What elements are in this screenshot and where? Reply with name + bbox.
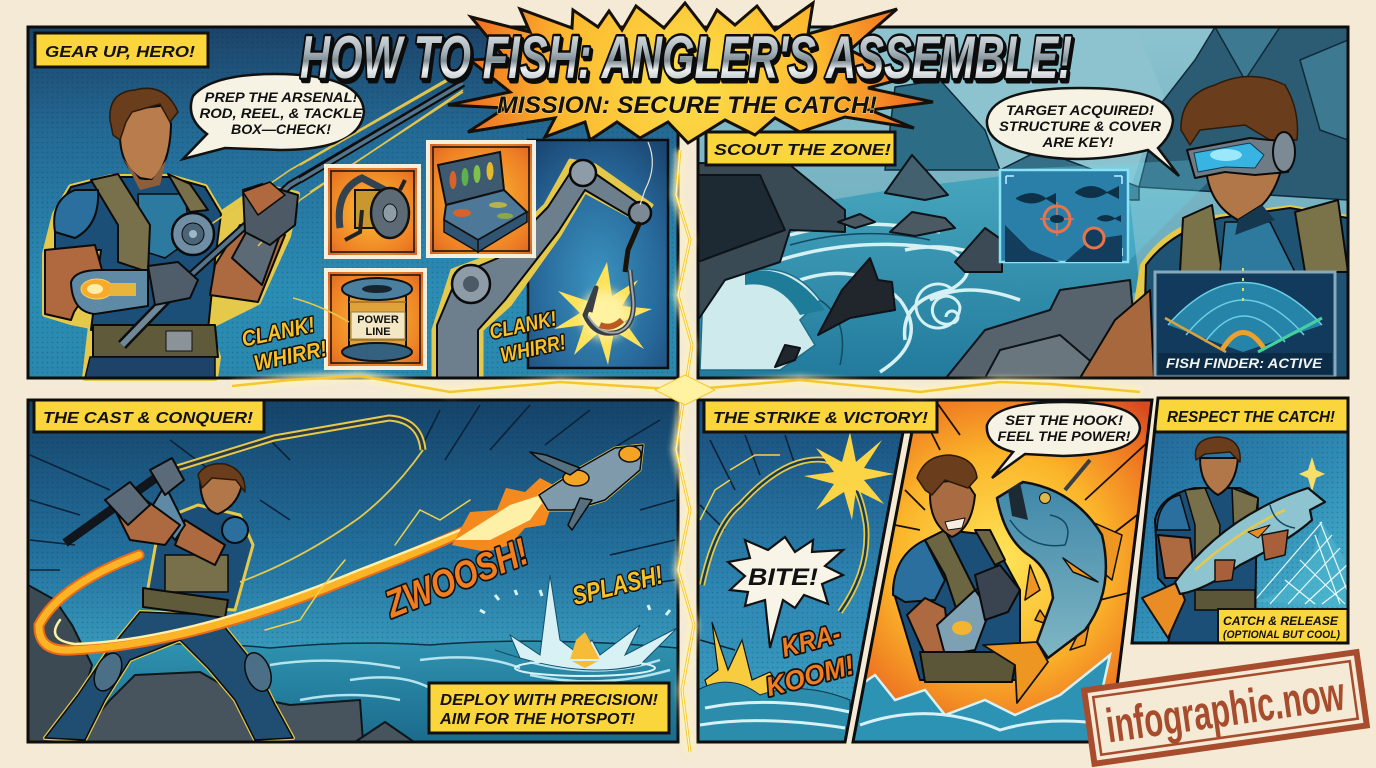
caption: deploy: AIM FOR THE HOTSPOT! — [439, 711, 636, 728]
angry face — [930, 480, 975, 537]
caption: strike: THE STRIKE & VICTORY! — [713, 410, 929, 427]
central dark rock — [818, 258, 895, 335]
speech bubble: arsenal: ROD, REEL, & TACKLE — [200, 106, 364, 121]
speech bubble: target: TARGET ACQUIRED! — [1006, 103, 1155, 118]
straps — [1180, 200, 1348, 272]
title text: HOW TO FISH: ANGLER'S ASSEMBLE! — [300, 24, 1072, 91]
sfx: clank whirr left: CLANK! — [239, 312, 317, 352]
title starburst — [300, 3, 1072, 143]
water — [853, 655, 1120, 742]
panel 3 frame — [28, 400, 678, 742]
icon: power line spool — [293, 270, 425, 368]
hair — [1181, 76, 1298, 145]
speech bubble: arsenal — [183, 74, 364, 159]
sfx: kra-koom: KRA- — [778, 618, 844, 663]
head — [120, 105, 171, 180]
inner blue panel — [528, 140, 668, 368]
burst: bite — [728, 537, 843, 648]
caption: catch and release: (OPTIONAL BUT COOL) — [1223, 629, 1340, 641]
caption: gear up — [35, 33, 208, 67]
speech bubble: target: STRUCTURE & COVER — [999, 119, 1161, 134]
hud display — [1000, 170, 1128, 262]
cliffs — [880, 27, 1348, 200]
sfx: clank whirr right: CLANK! — [487, 307, 559, 344]
sfx: clank whirr right — [487, 307, 568, 368]
caption: cast: THE CAST & CONQUER! — [43, 410, 254, 427]
speech bubble: set the hook: SET THE HOOK! — [1005, 413, 1124, 428]
icon: tackle box — [428, 142, 534, 256]
upper arm — [45, 245, 102, 320]
sfx: clank whirr left — [239, 310, 329, 377]
sfx: zwoosh: ZWOOSH! — [379, 531, 534, 627]
rocket lure — [530, 445, 643, 530]
panel: scout the zone — [698, 27, 1348, 378]
hero with goggles — [1070, 76, 1348, 378]
goggles — [1187, 138, 1290, 178]
caption: gear up: GEAR UP, HERO! — [45, 44, 196, 61]
panel: gear up — [28, 27, 678, 378]
hero with rod — [45, 70, 463, 378]
fishing rod — [122, 70, 463, 345]
icon: power line spool: POWER — [357, 314, 399, 326]
bent rod — [700, 455, 866, 612]
sfx: kra-koom — [754, 617, 857, 702]
sea — [28, 641, 678, 742]
right forearm — [210, 225, 285, 302]
belt — [93, 325, 218, 357]
foam — [700, 269, 820, 370]
sfx: splash: SPLASH! — [569, 559, 666, 611]
reel on rod — [172, 213, 214, 255]
caption: deploy — [429, 683, 669, 733]
gauntlet — [71, 270, 148, 314]
sparkle — [1299, 457, 1325, 492]
speech bubble: set the hook: FEEL THE POWER! — [998, 429, 1131, 444]
shoulder pad — [54, 190, 98, 238]
whirlpool — [916, 284, 960, 328]
water splash — [480, 575, 677, 676]
sfx: clank whirr right: WHIRR! — [498, 331, 568, 367]
cast rod — [65, 418, 423, 582]
speech bubble: target — [987, 88, 1179, 176]
leaping fish — [983, 482, 1122, 703]
sfx: clank whirr left: WHIRR! — [252, 336, 329, 376]
speech bubble: arsenal: BOX—CHECK! — [231, 122, 332, 137]
icon: glowing hook — [554, 262, 652, 365]
river — [698, 175, 1140, 378]
caption: catch and release: CATCH & RELEASE — [1223, 614, 1339, 628]
panel 2 frame — [698, 27, 1348, 378]
speech bubble: arsenal: PREP THE ARSENAL! — [204, 90, 358, 105]
net — [1252, 522, 1347, 605]
hero casting — [45, 418, 423, 740]
caption: respect — [1155, 398, 1348, 432]
rocks — [698, 155, 1139, 378]
fish finder: FISH FINDER: ACTIVE — [1166, 355, 1323, 371]
panel: the cast and conquer — [28, 400, 678, 742]
sfx: kra-koom: KOOM! — [763, 650, 857, 702]
chest plate — [138, 194, 190, 258]
hud beams — [1024, 160, 1208, 260]
icon: power line spool: LINE — [365, 326, 391, 338]
panel: the strike left — [698, 400, 913, 742]
speech bubble: set the hook — [987, 402, 1140, 478]
caption: scout: SCOUT THE ZONE! — [714, 142, 892, 159]
speed lines — [30, 405, 675, 585]
caption: cast — [34, 400, 264, 432]
glowing cast arc — [39, 500, 520, 650]
shore rocks — [28, 585, 414, 742]
speech bubble: target: ARE KEY! — [1041, 135, 1114, 150]
subtitle: MISSION: SECURE THE CATCH! — [497, 92, 877, 119]
caught fish — [1142, 488, 1325, 638]
torso — [145, 505, 253, 610]
hero fighting — [893, 455, 1020, 682]
rod tip over bubble — [300, 72, 463, 192]
caption: respect: RESPECT THE CATCH! — [1167, 409, 1336, 426]
caption: catch and release — [1218, 609, 1349, 643]
caption: scout — [706, 132, 895, 165]
lightning divider — [232, 150, 1140, 752]
water — [698, 682, 850, 742]
caption: deploy: DEPLOY WITH PRECISION! — [440, 692, 659, 709]
head — [200, 470, 243, 514]
hero with catch — [1155, 437, 1258, 643]
hook line — [1065, 460, 1090, 490]
flame head — [452, 478, 552, 552]
arm to hands — [152, 490, 186, 541]
panel: respect the catch — [1130, 398, 1350, 644]
robot arm — [433, 142, 652, 378]
rod strike spark — [804, 432, 894, 520]
yellow splash — [704, 622, 780, 694]
right glove — [243, 184, 298, 245]
panel: the strike right — [704, 400, 1155, 742]
burst: bite: BITE! — [748, 564, 818, 591]
legs — [45, 612, 293, 740]
caption: strike — [704, 400, 937, 432]
fish finder — [1155, 268, 1335, 377]
icon: reel — [326, 166, 419, 257]
